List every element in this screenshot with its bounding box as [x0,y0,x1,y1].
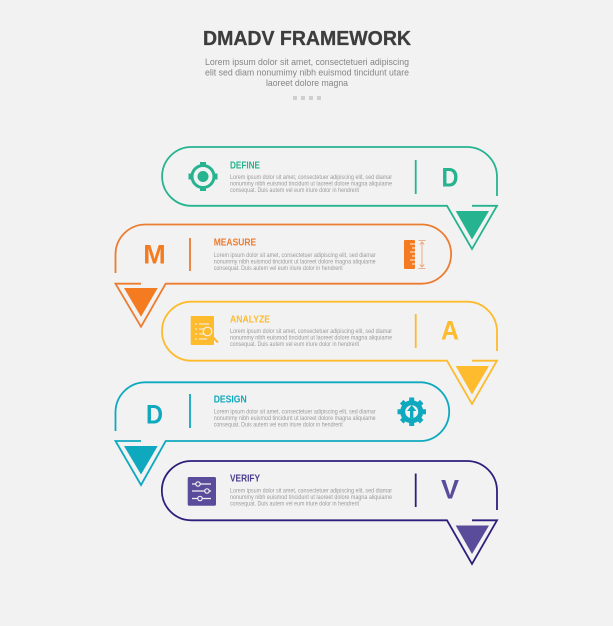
letter: V: V [441,474,459,504]
text: analyze: nonummy nibh euismod tincidunt ut laoreet dolore magna aliquiame [230,336,393,342]
label: define: DEFINE [230,160,260,172]
subtitle: elit sed diam nonumimy nibh euismod tincidunt utare [205,68,409,78]
text: measure: consequat. Duis autem vel eum iriure dolor in hendrerit [214,266,343,272]
letter: M: M [143,240,166,270]
icon: gear [398,398,426,426]
label: design: DESIGN [214,394,247,406]
title: DMADV FRAMEWORK [203,28,412,50]
panel: verify [162,461,497,564]
panel: define [162,147,497,249]
panel: analyze [162,302,497,404]
text: design: Lorem ipsum dolor sit amet, consectetuer adipiscing elit, sed diamar [214,410,376,416]
icon: document search [191,316,218,345]
text: design: consequat. Duis autem vel eum iriure dolor in hendrerit [214,423,343,429]
outline: define [162,147,497,249]
text: verify [230,488,393,507]
letter: A: A [441,316,459,346]
text: verify: Lorem ipsum dolor sit amet, consectetuer adipiscing elit, sed diamar [230,488,392,494]
text: verify: nonummy nibh euismod tincidunt ut laoreet dolore magna aliquiame [230,495,393,501]
triangle: define [456,211,489,240]
text: define [230,175,393,194]
pagination dots [293,96,321,100]
letter: D: D [146,400,163,430]
text: measure [214,253,376,272]
outline: measure [116,224,451,327]
label: analyze: ANALYZE [230,314,270,326]
text: define: Lorem ipsum dolor sit amet, consectetuer adipiscing elit, sed diamar [230,175,392,181]
divider: analyze [415,314,417,348]
divider: define [415,160,417,194]
letter: D: D [442,162,458,192]
icon: ruler [404,240,426,269]
outline: design [116,382,449,485]
panel: design [116,382,449,485]
text: define: consequat. Duis autem vel eum iriure dolor in hendrerit [230,188,359,194]
label: measure: MEASURE [214,238,256,248]
panel: measure [116,224,451,327]
text: measure: nonummy nibh euismod tincidunt ut laoreet dolore magna aliquiame [214,259,376,265]
triangle: verify [456,526,489,554]
text: analyze [230,329,393,348]
icon: sliders [188,477,216,506]
label: verify: VERIFY [230,474,260,484]
divider: verify [415,474,417,507]
triangle: design [124,446,158,474]
triangle: measure [124,288,158,317]
text: analyze: Lorem ipsum dolor sit amet, consectetuer adipiscing elit, sed diamar [230,329,392,335]
triangle: analyze [456,366,489,394]
text: design: nonummy nibh euismod tincidunt ut laoreet dolore magna aliquiame [214,416,376,422]
divider: measure [189,238,191,271]
subtitle [205,57,409,88]
outline: verify [162,461,497,564]
subtitle: laoreet dolore magna [266,78,349,88]
text: design [214,410,376,429]
text: measure: Lorem ipsum dolor sit amet, consectetuer adipiscing elit, sed diamar [214,253,376,259]
text: analyze: consequat. Duis autem vel eum iriure dolor in hendrerit [230,342,359,348]
outline: analyze [162,302,497,404]
divider: design [189,394,191,428]
text: verify: consequat. Duis autem vel eum iriure dolor in hendrerit [230,501,359,507]
icon: target [188,162,218,191]
subtitle: Lorem ipsum dolor sit amet, consectetueri adipiscing [205,57,409,67]
text: define: nonummy nibh euismod tincidunt ut laoreet dolore magna aliquiame [230,182,393,188]
